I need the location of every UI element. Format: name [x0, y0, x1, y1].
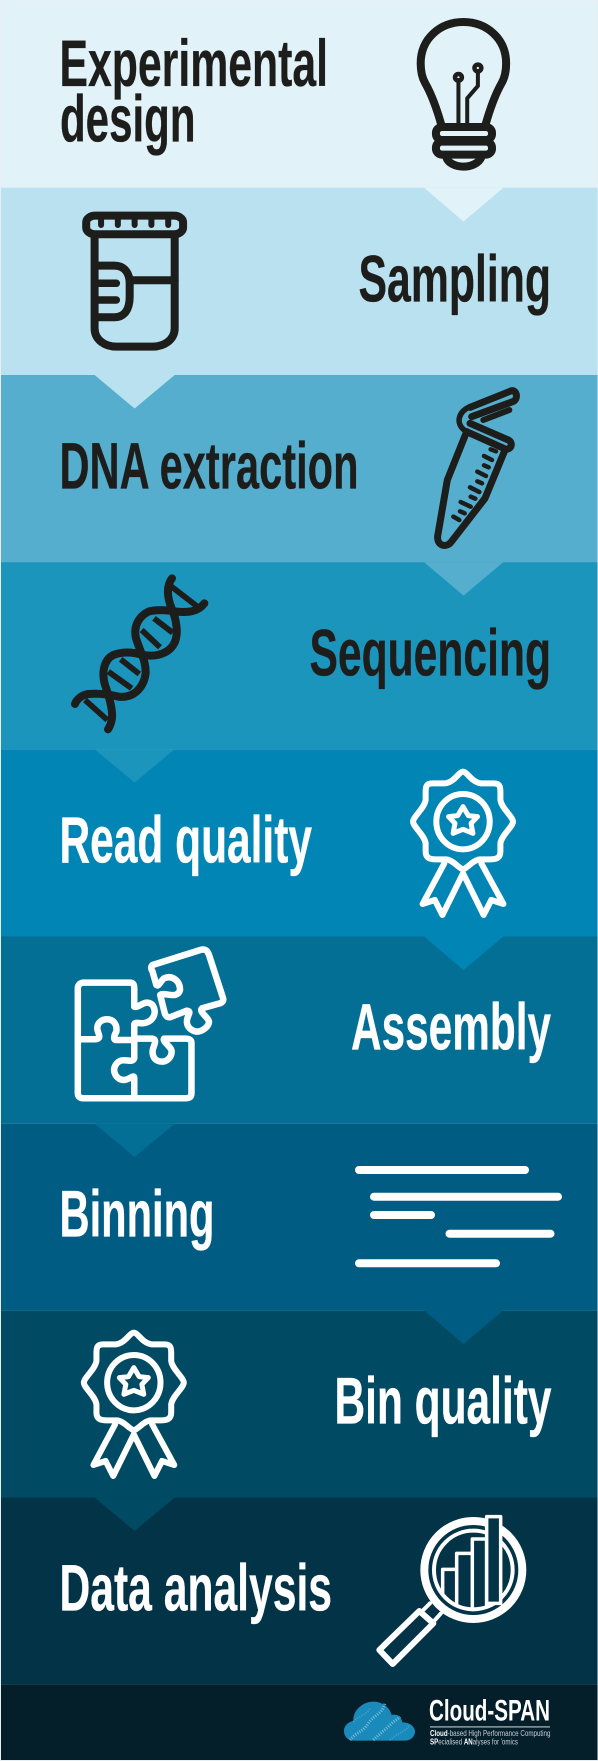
icon: light bulb — [421, 22, 506, 167]
heading: experimental design: Experimental — [60, 26, 328, 100]
arrow: from sequencing — [95, 749, 175, 782]
tagline: SPecialised ANalyses for 'omics — [430, 1738, 518, 1747]
arrow: from read quality — [424, 936, 503, 970]
icon: bins lines — [359, 1170, 558, 1263]
icon: jigsaw pieces — [78, 950, 223, 1098]
icon: magnifier with bar chart — [379, 1517, 522, 1664]
divider line — [430, 1726, 550, 1728]
icon: rosette badge — [84, 1333, 184, 1476]
heading: experimental design: design — [60, 82, 196, 156]
panel: DNA extraction — [1, 375, 598, 562]
heading: read quality: Read quality — [60, 803, 312, 877]
panel: read quality — [1, 749, 598, 936]
arrow: from binning — [424, 1310, 503, 1344]
heading: experimental design — [60, 26, 328, 156]
arrow: from experimental design — [424, 188, 503, 222]
icon: rosette badge — [413, 772, 513, 915]
panel: bin quality — [1, 1310, 598, 1498]
tagline — [430, 1729, 550, 1747]
logo: Cloud-SPAN cloud — [344, 1702, 415, 1741]
arrow: from sampling — [95, 375, 175, 408]
panel: binning — [1, 1124, 598, 1311]
tagline: Cloud-based High Performance Computing — [430, 1729, 550, 1738]
icon: microcentrifuge tube — [438, 391, 516, 545]
arrow: from bin quality — [95, 1498, 175, 1531]
panel: sequencing — [1, 562, 598, 749]
icon: DNA helix — [75, 578, 204, 729]
panel: experimental design — [1, 1, 598, 188]
heading: DNA extraction: DNA extraction — [60, 429, 358, 503]
heading: data analysis: Data analysis — [60, 1551, 332, 1625]
icon: sample jar — [86, 216, 183, 347]
panel: footer — [1, 1685, 598, 1760]
heading: binning: Binning — [60, 1177, 214, 1251]
panel: data analysis — [1, 1498, 598, 1685]
panel: assembly — [1, 936, 598, 1124]
panel: sampling — [1, 188, 598, 375]
arrow: from DNA extraction — [424, 562, 503, 596]
arrow: from assembly — [95, 1124, 175, 1157]
